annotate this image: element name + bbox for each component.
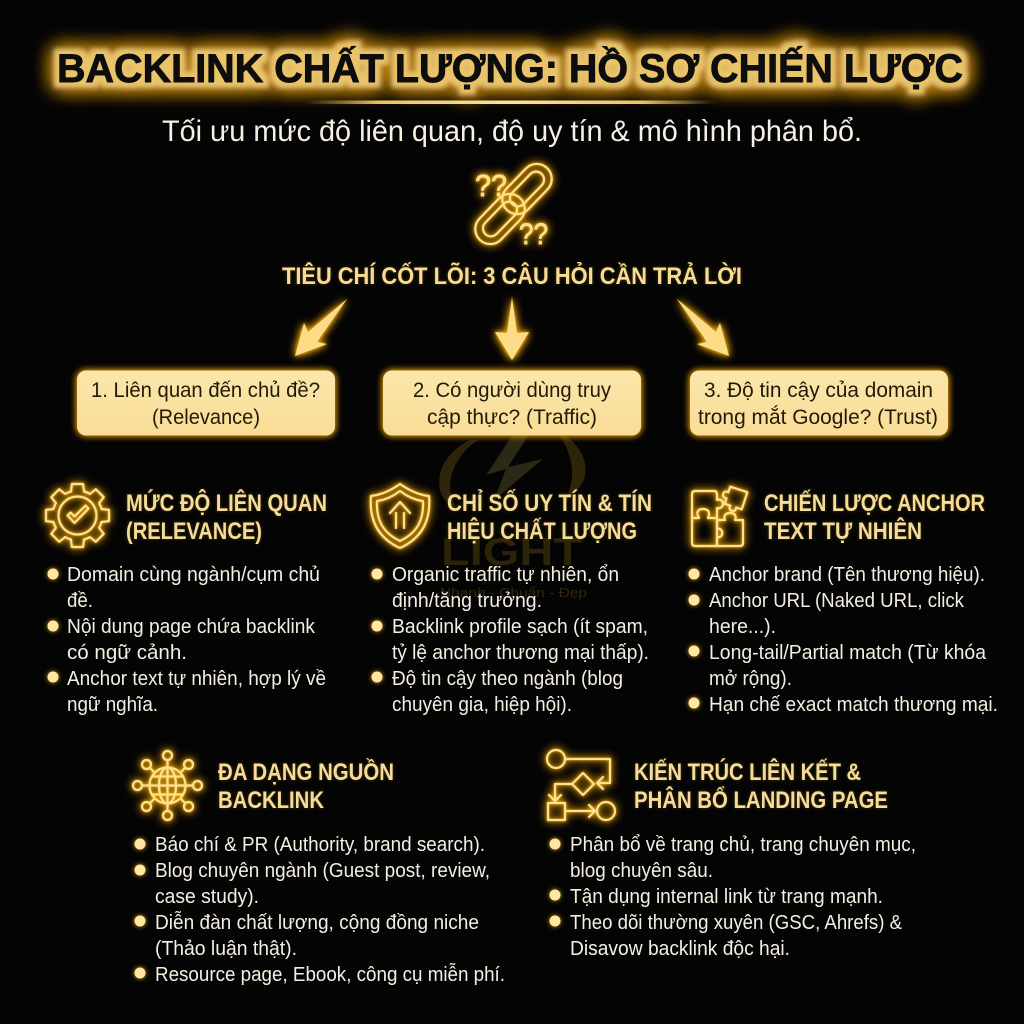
- box: question 1: [77, 370, 335, 436]
- icon: flowchart: [547, 750, 615, 820]
- heading: link architecture: PHÂN BỔ LANDING PAGE: [634, 786, 888, 814]
- box: question 3: 3. Độ tin cậy của domain: [704, 378, 933, 402]
- bullet list: source diversity: Báo chí & PR (Authority, brand search).: [155, 834, 485, 856]
- bullet list: anchor text strategy: here...).: [709, 616, 776, 638]
- panel: anchor text strategy: [688, 485, 998, 716]
- bullet list: relevance: [48, 564, 326, 716]
- box: question 2: 2. Có người dùng truy: [413, 378, 611, 402]
- icon: broken chain link with question marks: [469, 158, 558, 251]
- bullet list: authority signals: Backlink profile sạch (ít spam,: [392, 616, 648, 638]
- box: question 3: [690, 370, 948, 436]
- icon: broken chain link with question marks: ??: [519, 218, 548, 251]
- bullet list: link architecture: Disavow backlink độc hại.: [570, 938, 790, 960]
- bullet list: relevance: Domain cùng ngành/cụm chủ: [67, 564, 320, 586]
- bullet list: anchor text strategy: Hạn chế exact match thương mại.: [709, 694, 998, 716]
- heading: relevance: [126, 489, 327, 545]
- box: question 3: trong mắt Google? (Trust): [698, 404, 938, 429]
- heading: source diversity: ĐA DẠNG NGUỒN: [218, 758, 394, 786]
- icon: puzzle: [692, 485, 747, 546]
- watermark logo: Nhanh - Chuẩn - Đẹp: [440, 585, 587, 600]
- bullet list: authority signals: tỷ lệ anchor thương mại thấp).: [392, 642, 649, 664]
- heading: authority signals: CHỈ SỐ UY TÍN & TÍN: [447, 488, 652, 517]
- watermark logo: LIGHT: [441, 531, 582, 574]
- panel: authority signals: [371, 484, 652, 716]
- box: question 2: [383, 370, 641, 436]
- bullet list: source diversity: (Thảo luận thật).: [155, 938, 297, 960]
- box: question 1: (Relevance): [152, 405, 260, 429]
- box: question 2: cập thực? (Traffic): [427, 405, 597, 429]
- bullet list: authority signals: Độ tin cậy theo ngành (blog: [392, 668, 623, 690]
- heading: authority signals: [447, 488, 652, 545]
- bullet list: source diversity: Blog chuyên ngành (Guest post, review,: [155, 860, 490, 882]
- bullet list: link architecture: Tận dụng internal link từ trang mạnh.: [570, 886, 883, 908]
- icon: globe network: [133, 751, 202, 820]
- icon: broken chain link with question marks: ??: [475, 168, 507, 203]
- bullet list: source diversity: Diễn đàn chất lượng, cộng đồng niche: [155, 911, 479, 934]
- heading: relevance: MỨC ĐỘ LIÊN QUAN: [126, 489, 327, 517]
- bullet list: link architecture: blog chuyên sâu.: [570, 860, 713, 882]
- bullet list: authority signals: định/tăng trưởng.: [392, 590, 542, 612]
- panel: relevance: [46, 484, 327, 716]
- title underline: [305, 100, 717, 104]
- box: question 1: 1. Liên quan đến chủ đề?: [91, 378, 320, 402]
- heading: anchor text strategy: TEXT TỰ NHIÊN: [764, 517, 922, 545]
- bullet list: link architecture: Theo dõi thường xuyên (GSC, Ahrefs) &: [570, 912, 903, 934]
- arrow: left: [295, 299, 347, 356]
- bullet list: source diversity: [134, 834, 505, 986]
- bullet list: anchor text strategy: [688, 564, 998, 716]
- icon: shield with arrow: [371, 484, 429, 548]
- bullet list: authority signals: [372, 564, 649, 716]
- bullet list: source diversity: case study).: [155, 886, 259, 908]
- icon: gear with check: [46, 484, 109, 547]
- bullet list: anchor text strategy: Anchor brand (Tên thương hiệu).: [709, 564, 985, 586]
- watermark logo: [439, 436, 587, 600]
- bullet list: anchor text strategy: Long-tail/Partial match (Từ khóa: [709, 642, 987, 664]
- heading: anchor text strategy: CHIẾN LƯỢC ANCHOR: [764, 489, 985, 517]
- bullet list: link architecture: [550, 834, 916, 960]
- bullet list: relevance: Nội dung page chứa backlink: [67, 616, 316, 638]
- heading: source diversity: BACKLINK: [218, 787, 325, 814]
- arrow: right: [677, 299, 729, 356]
- bullet list: relevance: đề.: [67, 590, 93, 612]
- bullet list: relevance: Anchor text tự nhiên, hợp lý về: [67, 668, 326, 690]
- bullet list: link architecture: Phân bổ về trang chủ, trang chuyên mục,: [570, 834, 916, 856]
- title: BACKLINK CHẤT LƯỢNG: HỒ SƠ CHIẾN LƯỢC: [57, 45, 963, 91]
- heading: link architecture: [634, 758, 888, 814]
- bullet list: anchor text strategy: Anchor URL (Naked URL, click: [709, 590, 965, 612]
- heading: link architecture: KIẾN TRÚC LIÊN KẾT &: [634, 758, 861, 786]
- bullet list: anchor text strategy: mở rộng).: [709, 668, 792, 690]
- subtitle: Tối ưu mức độ liên quan, độ uy tín & mô hình phân bổ.: [162, 115, 862, 148]
- bullet list: relevance: ngữ nghĩa.: [67, 694, 158, 716]
- heading: anchor text strategy: [764, 489, 985, 545]
- heading: relevance: (RELEVANCE): [126, 518, 262, 545]
- bullet list: relevance: có ngữ cảnh.: [67, 642, 187, 664]
- heading: source diversity: [218, 758, 394, 814]
- arrow: middle: [495, 297, 529, 360]
- bullet list: authority signals: chuyên gia, hiệp hội).: [392, 694, 572, 716]
- bullet list: source diversity: Resource page, Ebook, công cụ miễn phí.: [155, 963, 505, 986]
- panel: link architecture: [547, 750, 916, 960]
- section heading: core criteria: TIÊU CHÍ CỐT LÕI: 3 CÂU HỎI CẦN TRẢ LỜI: [282, 261, 742, 290]
- panel: source diversity: [133, 751, 505, 986]
- heading: authority signals: HIỆU CHẤT LƯỢNG: [447, 517, 637, 545]
- bullet list: authority signals: Organic traffic tự nhiên, ổn: [392, 564, 619, 586]
